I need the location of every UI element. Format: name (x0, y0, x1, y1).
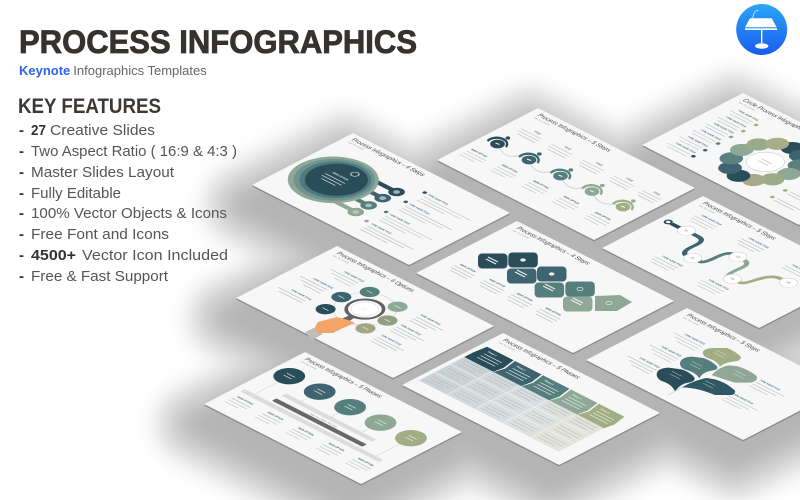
feature list: 100% Vector Objects & Icons (31, 205, 227, 222)
option labels: TYPE YOUR TITLE (289, 289, 313, 301)
phase labels (225, 395, 377, 472)
step numbers (659, 229, 792, 297)
phase headers: Phase 3 (543, 379, 556, 386)
option labels (272, 262, 453, 354)
concentric circles (269, 147, 398, 213)
feature list (19, 122, 237, 285)
slide: 4 steps with arms: Process Infographics – 4 Steps (349, 138, 427, 177)
option labels: MAIN OPTION (544, 307, 563, 316)
step icons (488, 136, 636, 212)
leaves (657, 348, 757, 395)
option bubbles (308, 280, 421, 338)
slide: 5 phases table: Process Infographics – 5 Phases (500, 338, 582, 380)
feature list: - (19, 268, 24, 285)
step labels: TITLE (594, 162, 604, 167)
option labels: TYPE YOUR TITLE (419, 314, 442, 326)
slide: 5 steps leaves: Type Your Subtitle (681, 317, 700, 326)
slide: 5 phases circles: Type Your Subtitle (299, 361, 318, 370)
phase headers: Phase 4 (571, 394, 584, 400)
phase headers: Phase 5 (599, 408, 612, 414)
phase labels: MAIN OPTION (327, 442, 346, 452)
step labels: TYPE YOUR TITLE (747, 237, 771, 249)
slide: snake 5 steps: Type Your Subtitle (697, 205, 716, 214)
step labels: MAIN OPTION (470, 148, 489, 158)
slide: diamonds 4 steps: Type Your Subtitle (511, 230, 530, 239)
option labels left: TYPE YOUR TITLE (724, 116, 748, 128)
phase headers: Phase 2 (515, 365, 528, 372)
icon: keynote logo (736, 4, 787, 55)
option labels: MAIN OPTION (459, 263, 477, 273)
option labels left: TYPE YOUR TITLE (699, 129, 723, 141)
icon: hand holding magnifier (305, 315, 355, 340)
step numbers: 05 (785, 281, 792, 285)
phase labels: MAIN OPTION (236, 396, 255, 405)
step labels: MAIN OPTION (500, 164, 519, 173)
labels: TYPE YOUR TITLE (683, 333, 707, 345)
arms (320, 173, 408, 219)
feature list: Vector Icon Included (82, 247, 228, 264)
slide: 5 steps top: Type Your Subtitle (532, 117, 551, 126)
title: PROCESS INFOGRAPHICS (19, 24, 417, 60)
phase labels: MAIN OPTION (266, 411, 285, 421)
slide: 6 options magnifier: Process Infographics – 6 Options (334, 251, 416, 293)
step list (354, 190, 477, 253)
labels: TYPE YOUR TITLE (660, 345, 683, 357)
labels: TYPE YOUR TITLE (758, 379, 782, 391)
step labels: TITLE (625, 177, 635, 182)
table cells (419, 356, 605, 452)
step labels: TYPE YOUR TITLE (661, 255, 684, 267)
slide: 4 steps with arms: Type Your Subtitle (346, 141, 365, 151)
slide: 6 options magnifier (235, 246, 495, 380)
ring of bubbles (698, 127, 800, 196)
diamond tiles (478, 252, 632, 312)
step list: TYPE YOUR TITLE (369, 223, 393, 235)
step labels: TYPE YOUR TITLE (700, 214, 723, 226)
step numbers: 03 (734, 255, 741, 259)
feature list: Two Aspect Ratio ( 16:9 & 4:3 ) (31, 143, 237, 160)
step labels (628, 212, 800, 309)
step labels: TITLE (652, 191, 662, 196)
option labels: MAIN OPTION (515, 292, 534, 302)
step labels (460, 123, 667, 228)
slide: 6 options magnifier: Type Your Subtitle (331, 255, 350, 264)
magnifier ring (320, 286, 410, 332)
labels: TYPE YOUR TITLE (638, 357, 661, 369)
labels (621, 329, 798, 420)
phase labels: MAIN OPTION (357, 457, 375, 467)
slide: circle process (641, 93, 800, 227)
option labels: TYPE YOUR TITLE (342, 271, 366, 283)
subtitle: KeynoteInfographics Templates (19, 63, 207, 78)
timeline bars: Type Your Phase Title Here (308, 413, 339, 428)
phase circles (243, 365, 433, 462)
step list: TYPE YOUR TITLE (408, 203, 431, 215)
slide: diamonds 4 steps (415, 221, 675, 355)
option labels: TYPE YOUR TITLE (311, 277, 335, 290)
slide: diamonds 4 steps: Process Infographics – 4 Steps (514, 226, 592, 266)
labels: TYPE YOUR TITLE (731, 393, 755, 405)
feature list: - (19, 143, 24, 160)
feature list: 27 (31, 122, 46, 139)
option labels left: TYPE YOUR TITLE (674, 142, 698, 154)
feature list: Fully Editable (31, 185, 121, 202)
slide: 5 steps top (436, 108, 696, 242)
option labels left: TYPE YOUR TITLE (712, 122, 736, 134)
feature list: Free & Fast Support (31, 268, 169, 285)
step labels: MAIN OPTION (562, 195, 581, 205)
feature list: - (19, 226, 24, 243)
option labels: TYPE YOUR TITLE (379, 334, 403, 346)
step labels: TITLE (532, 130, 543, 135)
slide: snake 5 steps (601, 196, 800, 330)
slide: 5 phases table: Type Your Subtitle (497, 342, 516, 351)
option labels: TYPE YOUR TITLE (399, 324, 423, 336)
feature list: - (19, 122, 24, 139)
step labels: TITLE (563, 146, 573, 151)
feature list: - (19, 247, 24, 264)
slide: 5 phases circles (203, 352, 463, 486)
feature list: - (19, 205, 24, 222)
slide: 4 steps with arms (251, 133, 511, 267)
option labels left: TYPE YOUR TITLE (686, 135, 710, 148)
heading: key features: KEY FEATURES (18, 95, 161, 118)
slide: 5 phases table (401, 333, 661, 467)
magnifier ring: ⋮⋮ (360, 307, 370, 312)
step labels: MAIN OPTION (532, 180, 551, 189)
option labels: MAIN OPTION (488, 278, 507, 288)
snake path (636, 217, 800, 302)
option labels (447, 262, 566, 323)
slide: 5 steps leaves: Process Infographics – 5 Steps (684, 313, 762, 353)
timeline bars (240, 381, 400, 462)
phase headers (464, 346, 627, 429)
feature list: Master Slides Layout (31, 164, 175, 181)
step numbers: 04 (729, 277, 736, 281)
slide: snake 5 steps: Process Infographics – 5 Steps (700, 201, 778, 241)
step list: TYPE YOUR TITLE (388, 213, 412, 225)
slide: circle process: Type Your Subtitle (737, 102, 756, 111)
step list: TYPE YOUR TITLE (426, 193, 450, 206)
feature list: 4500+ (31, 247, 76, 264)
step labels: TYPE YOUR TITLE (707, 279, 731, 291)
phase labels: MAIN OPTION (297, 427, 316, 436)
concentric circles: MAIN OPTION (331, 171, 350, 181)
feature list: Free Font and Icons (31, 226, 169, 243)
step numbers: 01 (683, 229, 690, 233)
feature list: Creative Slides (50, 122, 155, 139)
step numbers: 02 (689, 256, 696, 260)
slide: 5 steps top: Process Infographics – 5 Steps (535, 113, 613, 153)
drop shadow behind slides (196, 113, 800, 500)
feature list: - (19, 185, 24, 202)
phase headers: Phase 1 (486, 351, 499, 357)
option labels left: TYPE YOUR TITLE (737, 109, 760, 122)
option labels left (664, 107, 800, 212)
slide: 5 steps leaves (585, 308, 800, 442)
feature list: - (19, 164, 24, 181)
step labels: MAIN OPTION (594, 211, 612, 221)
slide: 5 phases circles: Process Infographics – 5 Phases (302, 357, 384, 399)
